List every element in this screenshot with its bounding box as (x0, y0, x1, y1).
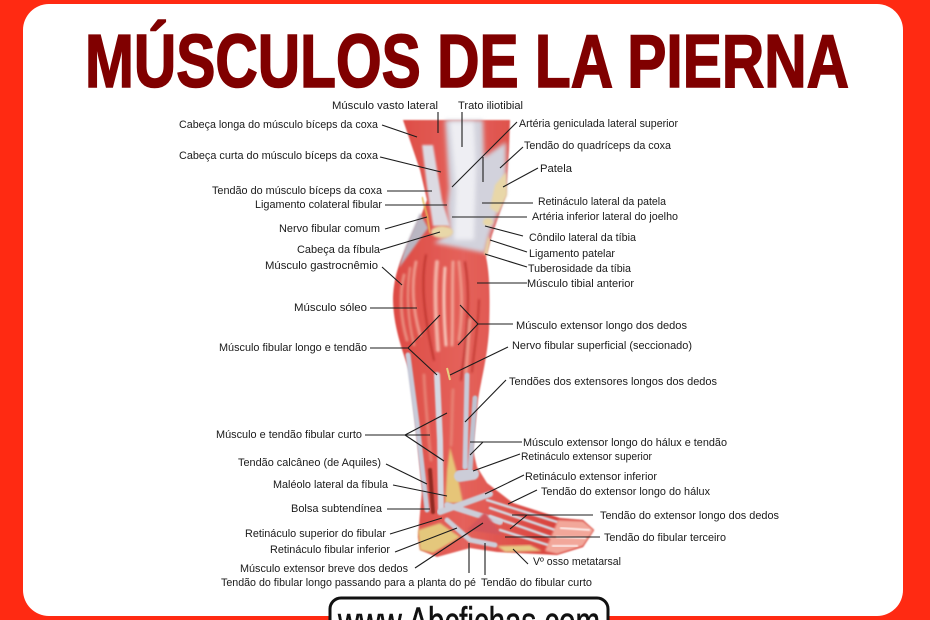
metatarsal bone (497, 545, 542, 552)
label: Patela (540, 163, 573, 175)
label: Retináculo lateral da patela (538, 196, 667, 208)
label: Nervo fibular comum (279, 223, 380, 235)
lower leg tendons (408, 355, 475, 512)
label: Ligamento patelar (529, 248, 615, 260)
label: Músculo fibular longo e tendão (219, 342, 367, 354)
label: Tendão do fibular terceiro (604, 532, 726, 544)
leader lines (365, 112, 600, 575)
extensor retinaculum bands (440, 474, 500, 545)
label: Músculo sóleo (294, 302, 367, 314)
label: Côndilo lateral da tíbia (529, 232, 637, 244)
achilles and ankle bone (445, 447, 463, 503)
label: Músculo e tendão fibular curto (216, 429, 362, 441)
label: Retináculo superior do fibular (245, 528, 386, 540)
website badge (330, 598, 608, 620)
label: Músculo extensor longo do hálux e tendão (523, 437, 727, 449)
label: Músculo extensor longo dos dedos (516, 320, 687, 332)
label: Bolsa subtendínea (291, 503, 383, 515)
foot tendons (487, 500, 557, 545)
label: Músculo gastrocnêmio (265, 260, 378, 272)
label: Retináculo fibular inferior (270, 544, 390, 556)
calf muscle striations (401, 255, 479, 460)
label: Tendões dos extensores longos dos dedos (509, 376, 717, 388)
label: Tendão do extensor longo do hálux (541, 486, 710, 498)
grey calf wedge (399, 213, 428, 268)
label: Tendão do fibular longo passando para a planta do pé (221, 577, 476, 589)
superficial fibular nerve (447, 368, 450, 380)
label: Tendão do quadríceps da coxa (524, 140, 672, 152)
label: Tendão do fibular curto (481, 577, 592, 589)
label: Maléolo lateral da fíbula (273, 479, 389, 491)
label: Ligamento colateral fibular (255, 199, 382, 211)
label: Tendão do extensor longo dos dedos (600, 510, 779, 522)
patella and knee bones (431, 172, 507, 256)
label: Nervo fibular superficial (seccionado) (512, 340, 692, 352)
heel bone (418, 523, 460, 553)
label: Trato iliotibial (458, 100, 523, 112)
label: Tendão calcâneo (de Aquiles) (238, 457, 381, 469)
thigh fascia and iliotibial tract (434, 120, 506, 253)
label: Músculo extensor breve dos dedos (240, 563, 408, 575)
label: Tendão do músculo bíceps da coxa (212, 185, 383, 197)
label: Artéria geniculada lateral superior (519, 118, 678, 130)
anatomical leg illustration (393, 120, 594, 557)
extensor brevis muscle (467, 512, 502, 535)
biceps tendon (422, 145, 450, 226)
anatomy labels (179, 100, 779, 589)
label: Músculo tibial anterior (527, 278, 634, 290)
label: Cabeça da fíbula (297, 244, 381, 256)
label: Cabeça longa do músculo bíceps da coxa (179, 119, 379, 131)
leg muscle base (393, 120, 594, 557)
label: Cabeça curta do músculo bíceps da coxa (179, 150, 379, 162)
fibular nerve (422, 197, 430, 233)
label: Músculo vasto lateral (332, 100, 438, 112)
label: Artéria inferior lateral do joelho (532, 211, 678, 223)
label: Retináculo extensor superior (521, 451, 652, 463)
toes (545, 520, 594, 554)
label: Tuberosidade da tíbia (528, 263, 632, 275)
label: Retináculo extensor inferior (525, 471, 657, 483)
label: Vº osso metatarsal (533, 556, 621, 568)
